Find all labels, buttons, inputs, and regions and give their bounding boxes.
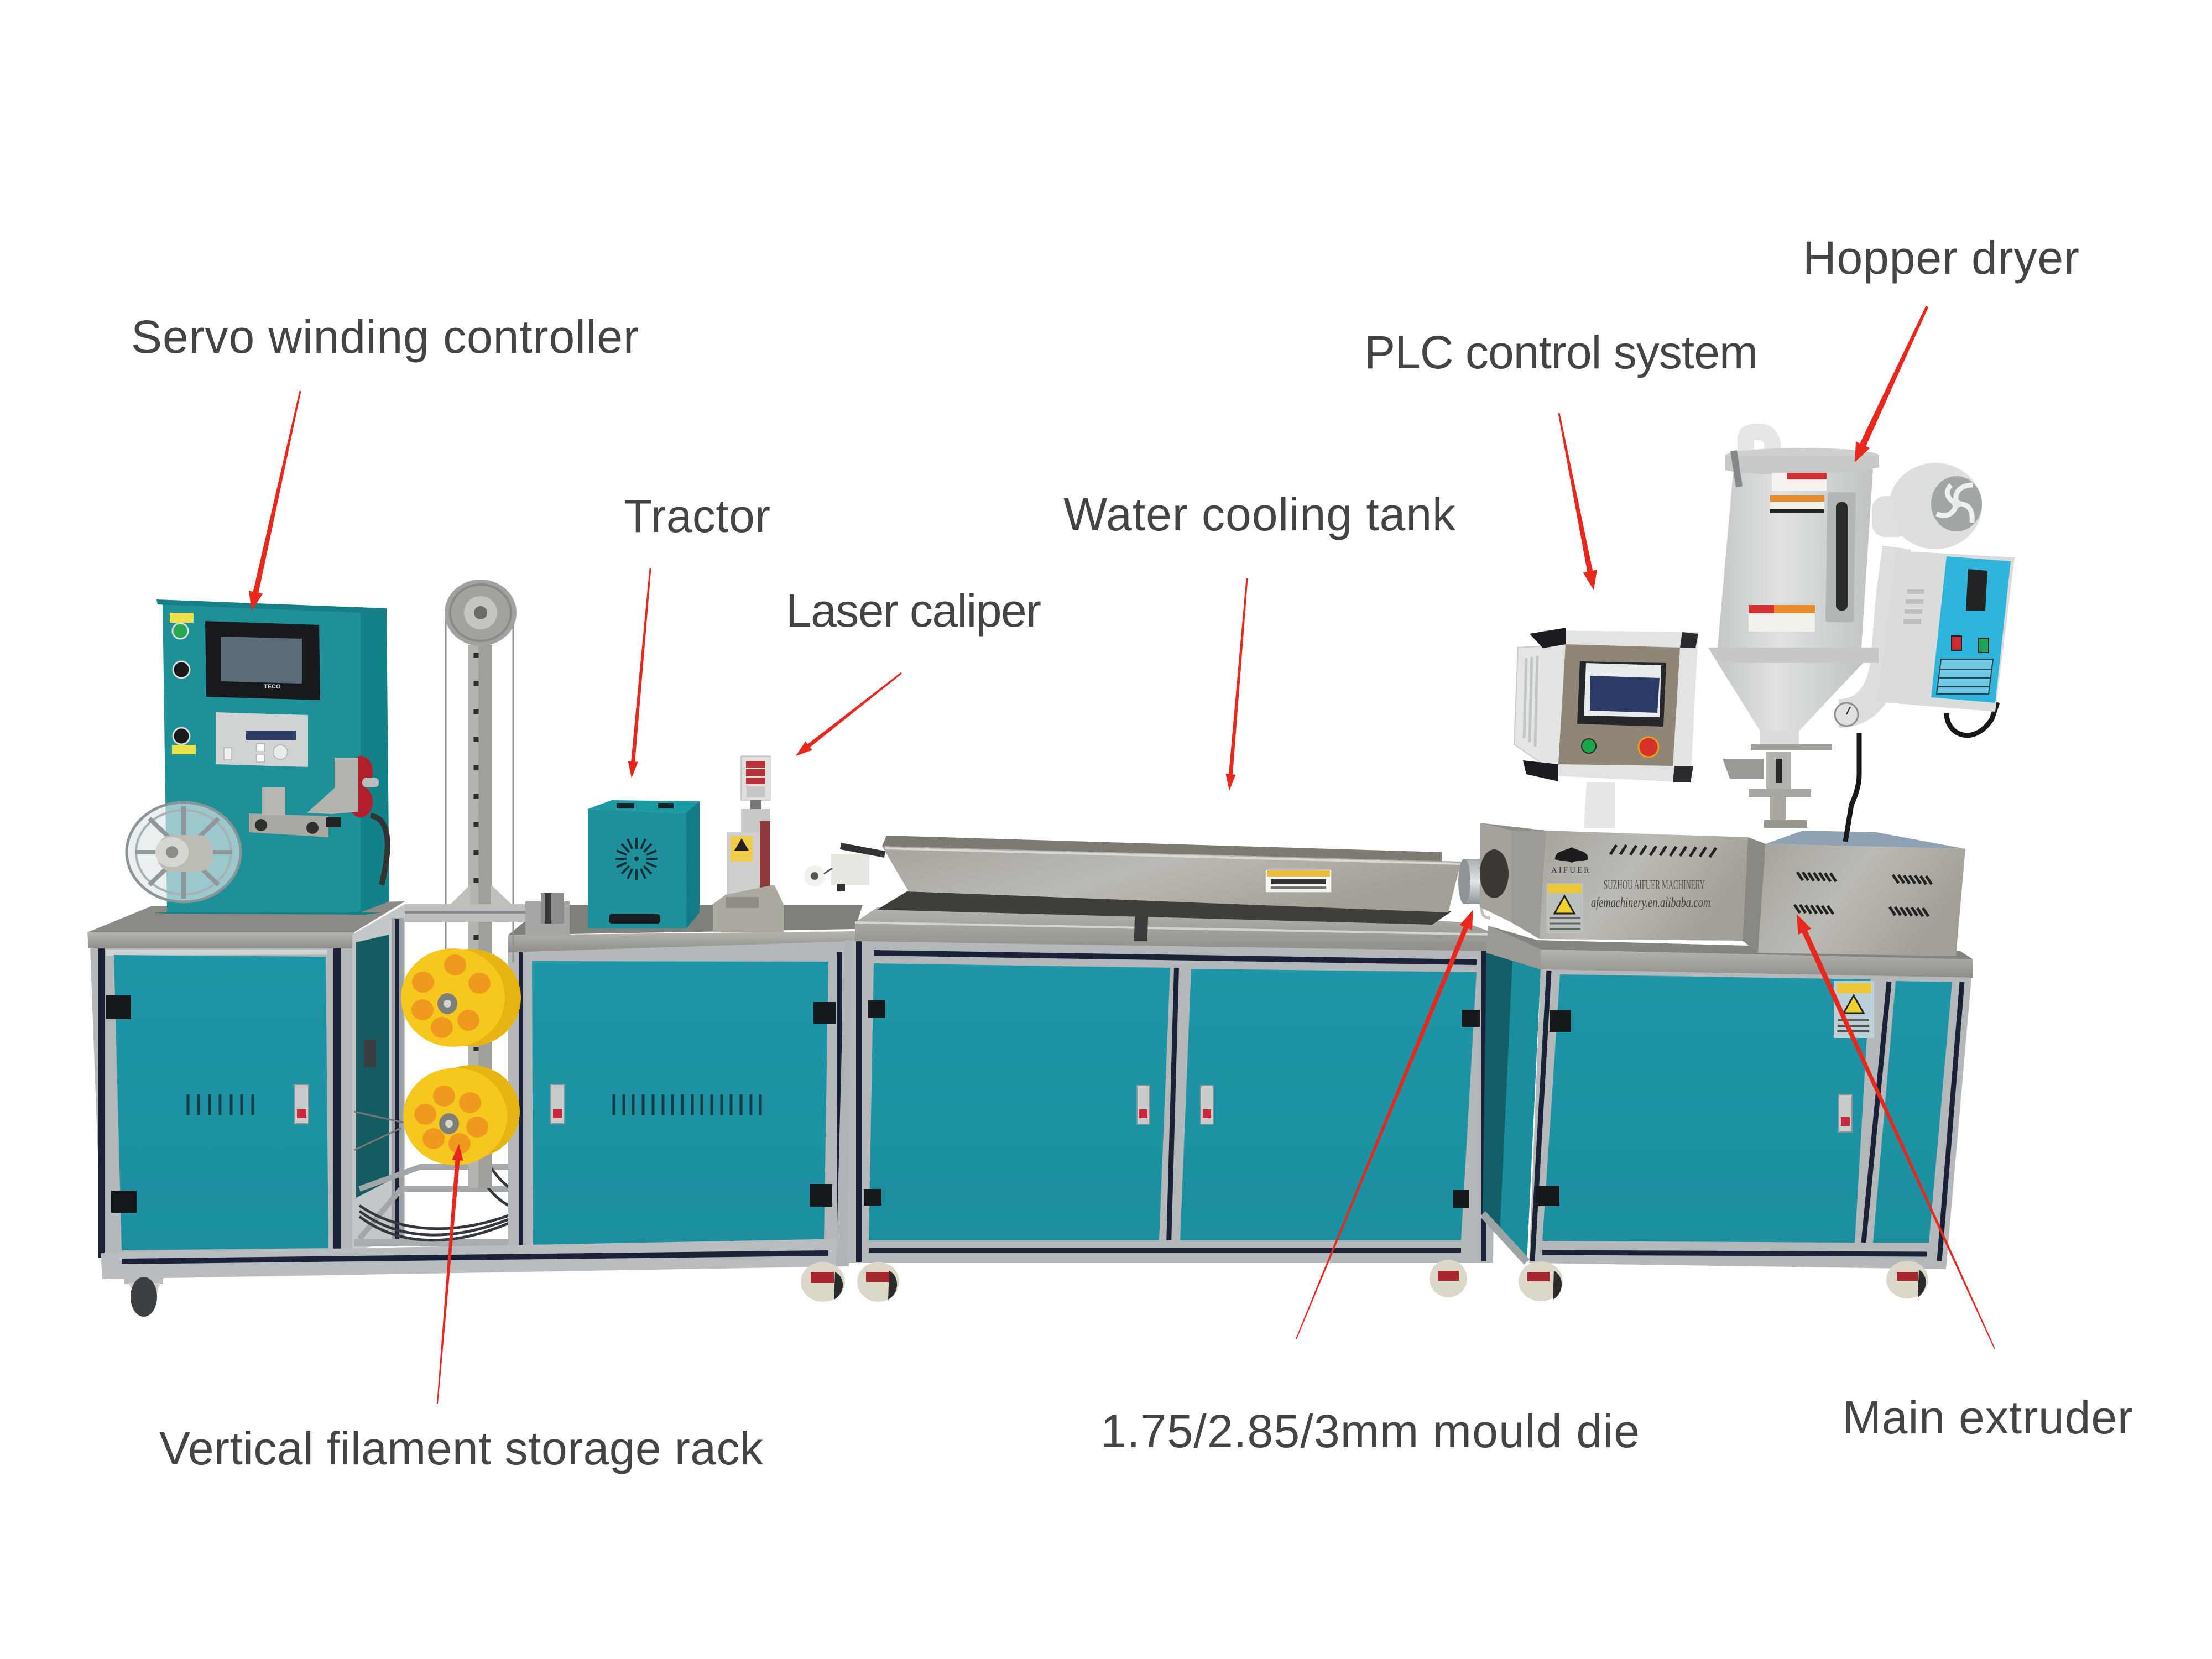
winding cabinet bbox=[87, 901, 405, 1272]
hopper lid bbox=[1725, 448, 1879, 487]
door right bbox=[1180, 969, 1477, 1240]
cables bbox=[359, 1161, 512, 1240]
hinges bbox=[1536, 1010, 1571, 1206]
tank warning label bbox=[1265, 869, 1332, 893]
mould die bbox=[1458, 859, 1540, 918]
hinges bbox=[864, 1000, 1480, 1208]
hopper ring bbox=[1708, 648, 1879, 663]
top plate bbox=[87, 901, 405, 948]
bottom rail: winding and middle cabinets bbox=[101, 940, 855, 1279]
pressure gauge bbox=[1835, 703, 1858, 726]
electric warning label bbox=[1834, 981, 1874, 1038]
hinges bbox=[106, 995, 137, 1213]
label: hopper dryer: Hopper dryer bbox=[1803, 232, 2079, 284]
caliper body bbox=[727, 821, 770, 896]
door handle bbox=[551, 1084, 564, 1124]
control box frame bbox=[1523, 628, 1698, 782]
casters: left unit bbox=[124, 1262, 845, 1317]
cabinet top strip bbox=[156, 599, 387, 614]
leveling foot bbox=[801, 1262, 845, 1302]
brand logo: AIFUER bbox=[1551, 866, 1591, 875]
hopper body bbox=[1718, 469, 1873, 648]
water tank cabinet bbox=[847, 941, 1496, 1302]
guide plate bbox=[249, 787, 341, 837]
yellow spool lower bbox=[403, 1065, 520, 1165]
door small bbox=[1873, 981, 1952, 1243]
heater box bbox=[1758, 831, 1965, 956]
tractor unit bbox=[588, 800, 700, 928]
sight glass bbox=[1825, 492, 1856, 622]
control box side vents bbox=[1514, 646, 1546, 766]
door: winding cabinet bbox=[114, 955, 328, 1250]
arrow: tractor bbox=[628, 568, 651, 778]
arrow: laser caliper bbox=[796, 672, 902, 756]
leveling feet bbox=[857, 1260, 1467, 1302]
filament wires bbox=[446, 613, 513, 962]
door vents bbox=[188, 1094, 253, 1115]
touch screen: TECO bbox=[264, 684, 281, 690]
company website: afemachinery.en.alibaba.com bbox=[1591, 895, 1710, 910]
tank body bbox=[882, 836, 1461, 912]
tractor side bbox=[686, 801, 700, 928]
label: main extruder: Main extruder bbox=[1843, 1391, 2133, 1443]
door left bbox=[869, 963, 1170, 1240]
door handle bbox=[295, 1084, 309, 1124]
yellow spool upper bbox=[401, 948, 521, 1047]
guide roller bbox=[804, 846, 885, 891]
company name: SUZHOU AIFUER MACHINERY bbox=[1604, 878, 1705, 893]
label: water cooling tank: Water cooling tank bbox=[1063, 488, 1456, 540]
hopper dryer bbox=[1708, 432, 2015, 842]
control panel face bbox=[1558, 644, 1680, 766]
pinch rollers bbox=[307, 756, 379, 817]
crush warning label bbox=[1546, 883, 1583, 933]
brand logo bbox=[1551, 847, 1591, 875]
laser caliper bbox=[713, 756, 784, 932]
HMI touch screen bbox=[1577, 661, 1666, 727]
tension controller bbox=[216, 712, 308, 767]
PLC control system bbox=[1514, 628, 1698, 828]
door main bbox=[1542, 974, 1870, 1243]
hinges bbox=[810, 1002, 836, 1207]
touch screen bbox=[205, 621, 320, 700]
filament spool bbox=[127, 802, 241, 902]
door handle bbox=[1839, 1094, 1852, 1132]
arrow: mould die bbox=[1296, 910, 1473, 1339]
door vents bbox=[614, 1094, 760, 1115]
extruder cabinet bbox=[1483, 926, 1973, 1301]
machine: full filament extrusion line bbox=[87, 432, 2015, 1317]
label: tractor: Tractor bbox=[624, 490, 770, 542]
winding controller box bbox=[127, 599, 389, 915]
tractor switches bbox=[617, 803, 674, 808]
side cable bbox=[371, 816, 388, 885]
cross bar bbox=[405, 885, 570, 936]
door handles bbox=[1137, 1086, 1213, 1124]
top pulley bbox=[445, 580, 517, 646]
main extruder housing bbox=[1480, 823, 1965, 956]
caliper neck bbox=[741, 800, 770, 832]
caliper display bbox=[741, 756, 770, 800]
arrow: servo winding controller bbox=[249, 391, 301, 611]
rear housing bbox=[1480, 823, 1546, 939]
rack pole bbox=[468, 645, 492, 1188]
warning labels bbox=[1749, 473, 1827, 632]
top plate bbox=[1486, 926, 1973, 978]
arrow: PLC control system bbox=[1558, 413, 1597, 590]
arrow: hopper dryer bbox=[1855, 306, 1928, 462]
tank base tray bbox=[855, 907, 1498, 951]
cabinet side bbox=[361, 608, 389, 912]
leveling feet bbox=[1519, 1261, 1928, 1301]
top pipe bbox=[1746, 432, 1772, 456]
label: PLC control system: PLC control system bbox=[1364, 326, 1758, 378]
cabinet base flange bbox=[152, 912, 382, 915]
label: vertical filament storage rack: Vertical filament storage rack bbox=[159, 1422, 764, 1474]
water cooling tank bbox=[804, 836, 1540, 951]
start and stop buttons bbox=[1582, 737, 1658, 757]
door: middle cabinet bbox=[532, 961, 828, 1245]
top plate bbox=[508, 905, 863, 952]
tractor handle bbox=[609, 914, 660, 924]
middle cabinet bbox=[508, 905, 863, 1247]
open bay between cabinets bbox=[352, 904, 512, 1251]
heater vents bbox=[1794, 872, 1932, 916]
side panel bbox=[1483, 953, 1541, 1262]
label: laser caliper: Laser caliper bbox=[786, 585, 1041, 637]
arrow: main extruder bbox=[1797, 914, 1995, 1349]
control box stand bbox=[1584, 782, 1615, 828]
tractor front bbox=[588, 809, 686, 928]
label: servo winding controller: Servo winding controller bbox=[131, 311, 639, 363]
caliper base bbox=[713, 885, 784, 932]
air duct bbox=[1839, 547, 1897, 713]
blower bbox=[1872, 463, 1982, 549]
cabinet front bbox=[163, 602, 361, 912]
tractor vent sunburst bbox=[615, 838, 658, 880]
start button bbox=[170, 613, 194, 639]
dryer control box bbox=[1877, 551, 2015, 712]
hopper valve bbox=[1723, 731, 1832, 828]
front housing bbox=[1540, 831, 1766, 953]
arrow: water cooling tank bbox=[1225, 578, 1248, 791]
vertical filament storage rack bbox=[401, 580, 570, 1188]
arrow: vertical filament storage rack bbox=[437, 1144, 463, 1404]
housing vents bbox=[1610, 845, 1716, 857]
tractor top bbox=[588, 800, 700, 813]
speed knobs bbox=[172, 661, 196, 754]
tank trough shadow bbox=[877, 891, 1452, 925]
label: mould die: 1.75/2.85/3mm mould die bbox=[1100, 1405, 1640, 1457]
power cable bbox=[1845, 702, 1997, 842]
hopper cone bbox=[1718, 663, 1863, 731]
